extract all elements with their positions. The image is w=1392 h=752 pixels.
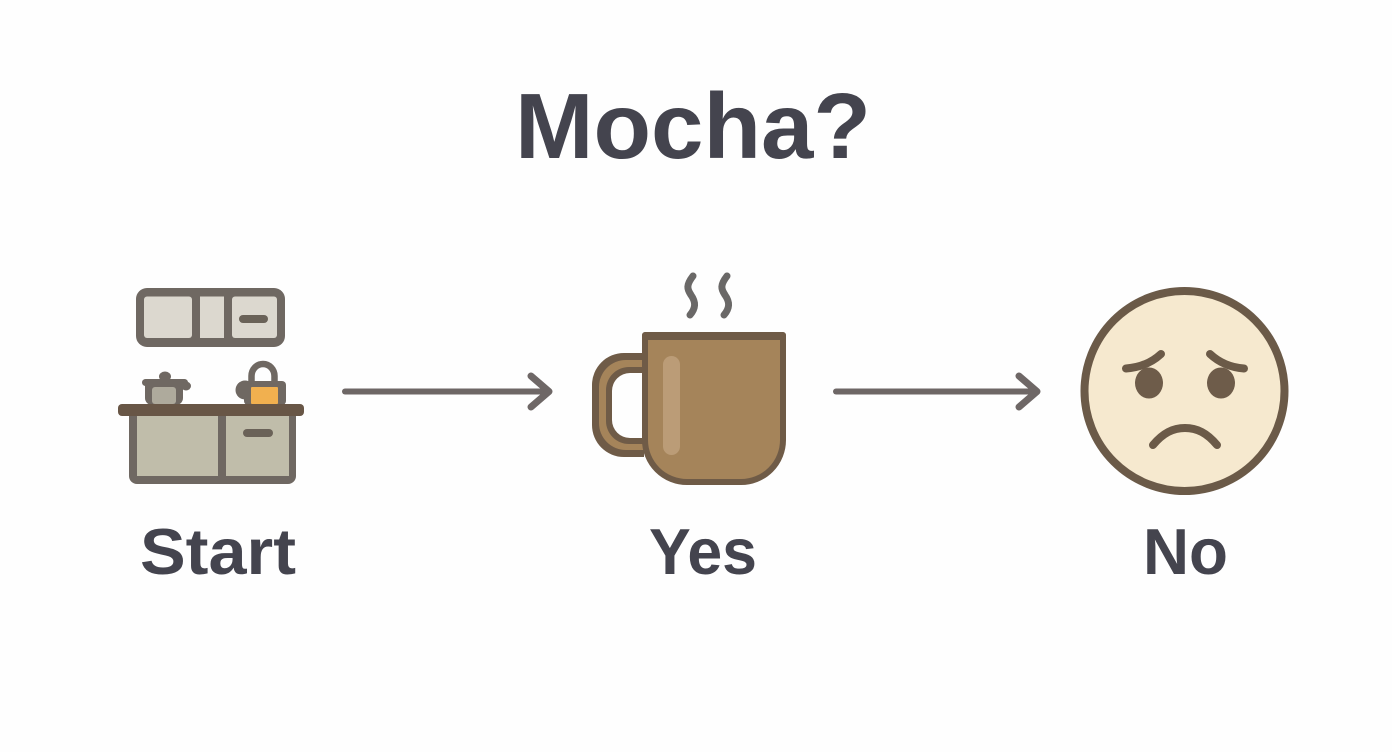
right eye [1207,368,1235,398]
upper cabinet [136,288,285,347]
handle [592,353,644,457]
mug rim [642,332,786,340]
icon: sad face [1084,291,1284,491]
mug body [645,335,783,482]
arrow: start to yes [345,376,549,407]
label: yes: Yes [649,515,757,588]
eyebrows [1126,354,1244,368]
icon: coffee mug [592,276,786,482]
face circle [1084,291,1284,491]
pot [142,372,191,405]
label: start: Start [140,515,296,588]
steam [688,276,729,315]
kettle [236,364,286,405]
countertop [118,404,304,416]
mouth [1153,428,1217,445]
title: Mocha? [515,74,871,178]
mug highlight [663,356,680,455]
lower cabinet [129,410,296,484]
left eye [1135,368,1163,398]
label: no: No [1143,515,1228,588]
icon: kitchen [118,288,304,484]
arrow: yes to no [836,376,1037,407]
